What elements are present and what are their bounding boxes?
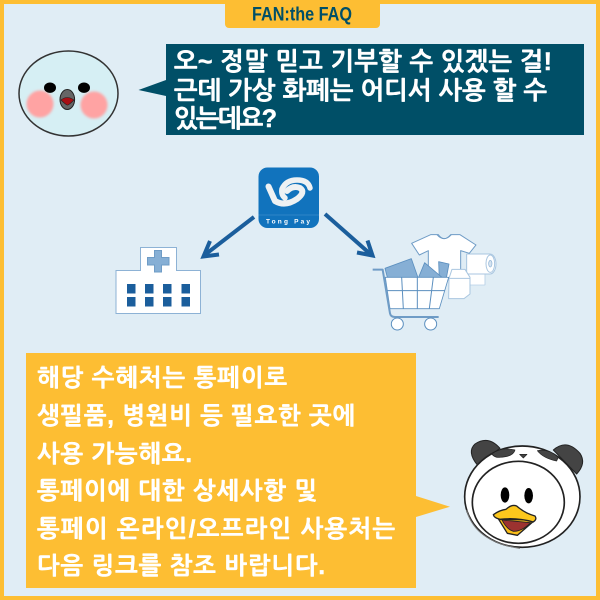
answer text: 통페이에 대한 상세사항 및: [37, 478, 317, 505]
question text: 오~ 정말 믿고 기부할 수 있겠는 걸!: [174, 48, 552, 76]
title text: FAN:the FAQ: [252, 4, 352, 26]
answer text: 통페이 온라인/오프라인 사용처는: [37, 516, 395, 543]
question text: 근데 가상 화폐는 어디서 사용 할 수: [174, 77, 547, 105]
icon: duck in panda hood: [465, 440, 583, 548]
icon: shopping cart with goods: [373, 235, 496, 330]
answer text: 해당 수혜처는 통페이로: [37, 365, 287, 392]
icon: hospital: [116, 248, 200, 314]
title tab: [225, 0, 380, 28]
question text: 있는데요?: [174, 105, 277, 133]
icon: Tong Pay logo: Tong Pay: [266, 218, 310, 226]
arrow: to hospital: [204, 217, 254, 256]
speech bubble: answer: [26, 353, 450, 588]
answer text: 다음 링크를 참조 바랍니다.: [37, 553, 325, 580]
icon: Tong Pay logo: [258, 168, 319, 228]
answer text: 사용 가능해요.: [37, 441, 192, 468]
answer text: 생필품, 병원비 등 필요한 곳에: [37, 403, 355, 430]
arrow: to shopping: [325, 214, 372, 256]
speech bubble: question: [138, 44, 584, 135]
icon: bird character: [19, 51, 118, 136]
